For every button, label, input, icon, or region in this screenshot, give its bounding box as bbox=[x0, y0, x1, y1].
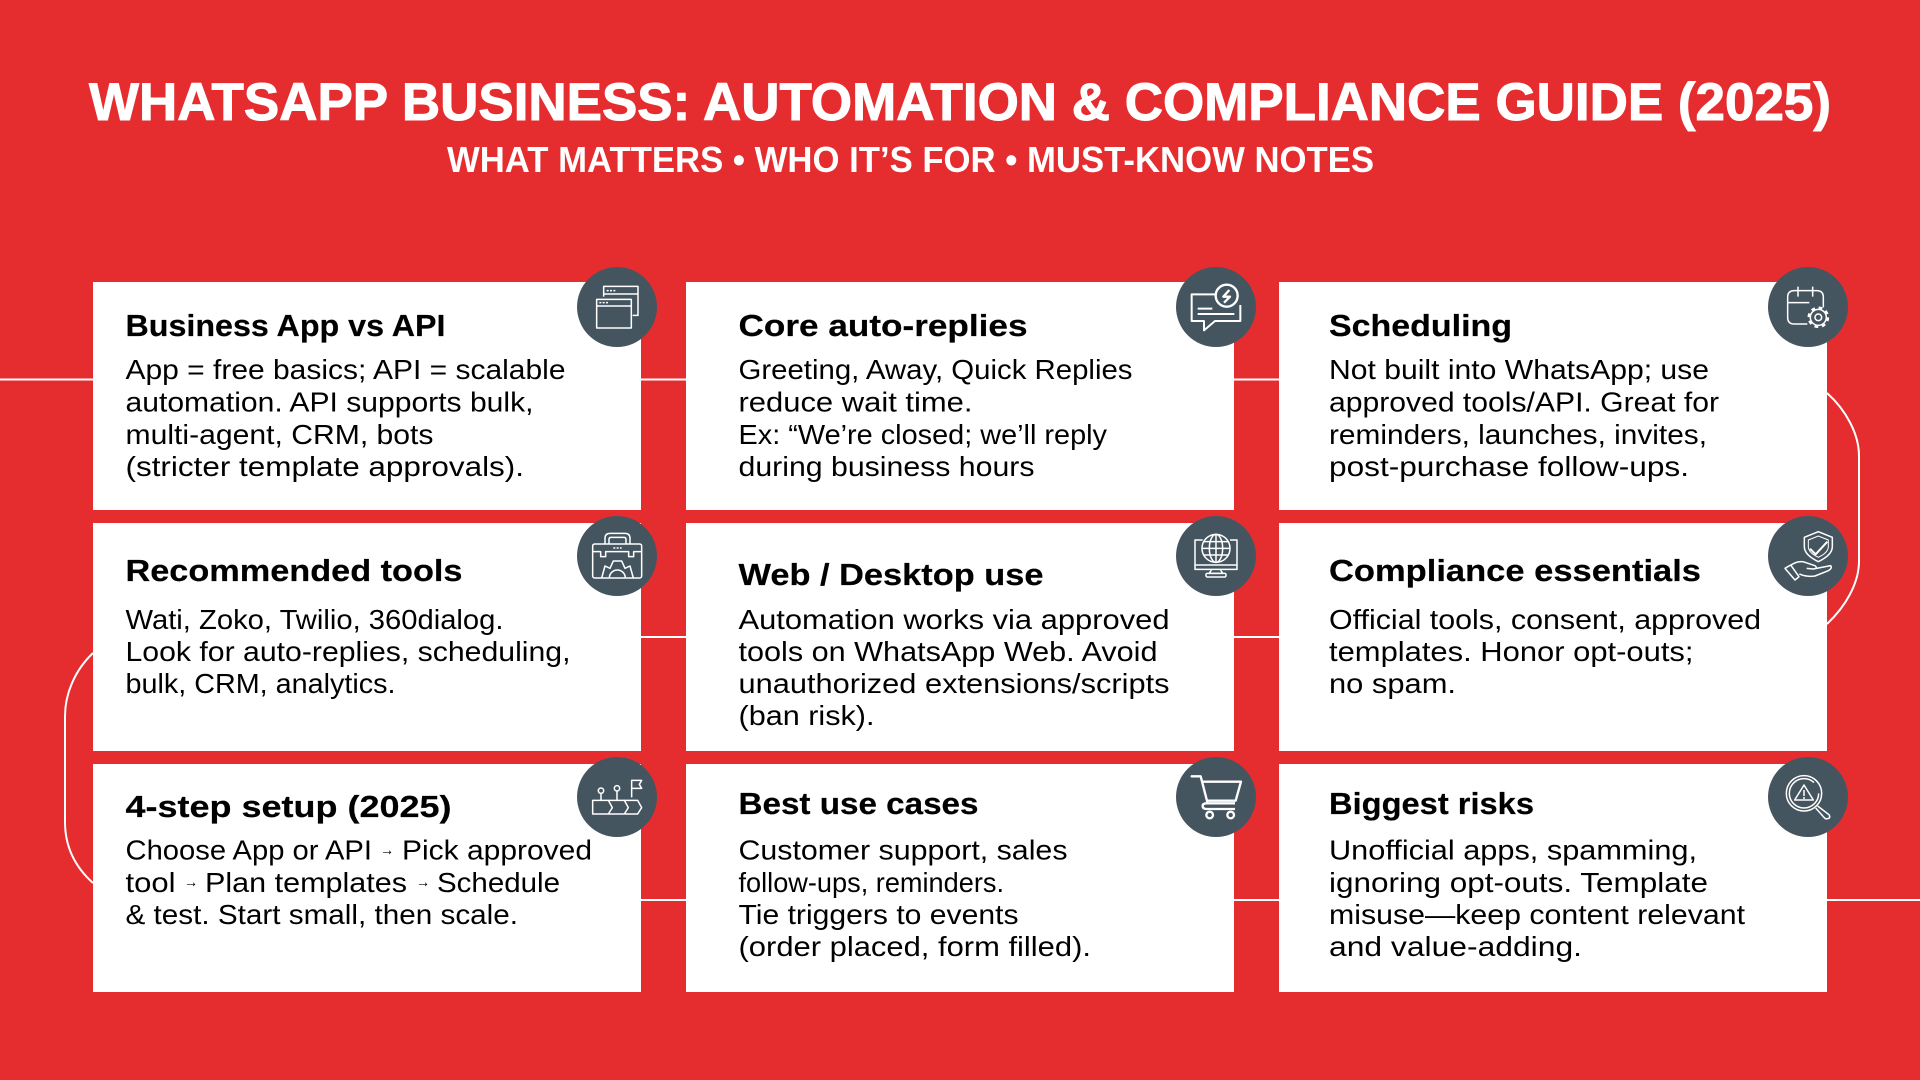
body text: Pick approved bbox=[402, 834, 592, 866]
icon: shopping cart bbox=[1176, 757, 1256, 837]
body text: post-purchase follow-ups. bbox=[1329, 451, 1689, 482]
icon: calendar with gear bbox=[1768, 267, 1848, 347]
icon: magnifier with warning bbox=[1768, 757, 1848, 837]
panel: Business App vs API bbox=[93, 267, 657, 510]
heading: Recommended tools bbox=[126, 553, 462, 588]
body text: (order placed, form filled). bbox=[738, 931, 1091, 962]
body text: bulk, CRM, analytics. bbox=[126, 668, 396, 699]
icon: desktop monitor with globe bbox=[1176, 516, 1256, 596]
icon: shield in hand bbox=[1768, 516, 1848, 596]
heading: Web / Desktop use bbox=[738, 557, 1044, 592]
body text bbox=[1329, 354, 1719, 482]
body text: templates. Honor opt-outs; bbox=[1329, 636, 1694, 667]
icon: process chain with flag bbox=[577, 757, 657, 837]
body text: Greeting, Away, Quick Replies bbox=[738, 354, 1132, 385]
body text: Unofficial apps, spamming, bbox=[1329, 834, 1697, 866]
body text: multi-agent, CRM, bots bbox=[126, 419, 434, 450]
panel: Compliance essentials bbox=[1279, 516, 1848, 751]
heading: Business App vs API bbox=[126, 308, 445, 343]
heading: Core auto-replies bbox=[738, 308, 1028, 343]
panel: Recommended tools bbox=[93, 516, 657, 751]
body text: (ban risk). bbox=[738, 700, 874, 731]
body text bbox=[1329, 604, 1761, 699]
body text bbox=[738, 604, 1170, 731]
title: WHATSAPP BUSINESS: AUTOMATION & COMPLIANCE GUIDE (2025) bbox=[89, 73, 1831, 132]
body text: & test. Start small, then scale. bbox=[126, 899, 518, 930]
body text: reminders, launches, invites, bbox=[1329, 419, 1707, 450]
body text: → bbox=[416, 874, 430, 891]
body text: (stricter template approvals). bbox=[126, 451, 524, 482]
heading: Biggest risks bbox=[1329, 786, 1534, 821]
subtitle: WHAT MATTERS • WHO IT’S FOR • MUST-KNOW NOTES bbox=[447, 139, 1374, 180]
body text bbox=[738, 354, 1132, 482]
body text: Customer support, sales bbox=[738, 834, 1068, 866]
body text bbox=[1329, 834, 1745, 962]
panel: Core auto-replies bbox=[686, 267, 1256, 510]
body text: and value-adding. bbox=[1329, 931, 1582, 962]
body text: reduce wait time. bbox=[738, 386, 972, 418]
body text: tools on WhatsApp Web. Avoid bbox=[738, 636, 1158, 667]
body text: Plan templates bbox=[205, 867, 407, 898]
body text: ignoring opt-outs. Template bbox=[1329, 867, 1708, 898]
panel: Best use cases bbox=[686, 757, 1256, 992]
panel: Scheduling bbox=[1279, 267, 1848, 510]
body text: Schedule bbox=[437, 867, 560, 898]
heading: 4-step setup (2025) bbox=[126, 789, 452, 824]
body text bbox=[126, 834, 592, 930]
connector lines between cards bbox=[0, 380, 1920, 900]
body text: unauthorized extensions/scripts bbox=[738, 668, 1170, 699]
panel: Web / Desktop use bbox=[686, 516, 1256, 751]
body text: approved tools/API. Great for bbox=[1329, 386, 1719, 418]
body text bbox=[738, 834, 1091, 962]
body text: → bbox=[380, 842, 394, 859]
body text: follow-ups, reminders. bbox=[738, 867, 1004, 898]
body text bbox=[126, 354, 566, 482]
body text: Automation works via approved bbox=[738, 604, 1170, 635]
body text: during business hours bbox=[738, 451, 1034, 482]
body text: tool bbox=[126, 867, 176, 898]
heading: Compliance essentials bbox=[1329, 553, 1701, 588]
body text: Tie triggers to events bbox=[738, 899, 1018, 930]
body text: App = free basics; API = scalable bbox=[126, 354, 566, 385]
icon: browser windows bbox=[577, 267, 657, 347]
body text: misuse—keep content relevant bbox=[1329, 899, 1745, 930]
icon: chat bubble with lightning bbox=[1176, 267, 1256, 347]
body text: Not built into WhatsApp; use bbox=[1329, 354, 1709, 385]
body text: Ex: “We’re closed; we’ll reply bbox=[738, 419, 1107, 450]
panel: 4-step setup (2025) bbox=[93, 757, 657, 992]
body text: automation. API supports bulk, bbox=[126, 386, 534, 418]
body text: Wati, Zoko, Twilio, 360dialog. bbox=[126, 604, 504, 635]
body text bbox=[126, 604, 570, 699]
heading: Scheduling bbox=[1329, 308, 1512, 343]
body text: Choose App or API bbox=[126, 834, 372, 866]
body text: Look for auto-replies, scheduling, bbox=[126, 636, 570, 667]
icon: toolbox with gear bbox=[577, 516, 657, 596]
panel: Biggest risks bbox=[1279, 757, 1848, 992]
body text: Official tools, consent, approved bbox=[1329, 604, 1761, 635]
body text: no spam. bbox=[1329, 668, 1456, 699]
heading: Best use cases bbox=[738, 786, 978, 821]
body text: → bbox=[184, 874, 198, 891]
